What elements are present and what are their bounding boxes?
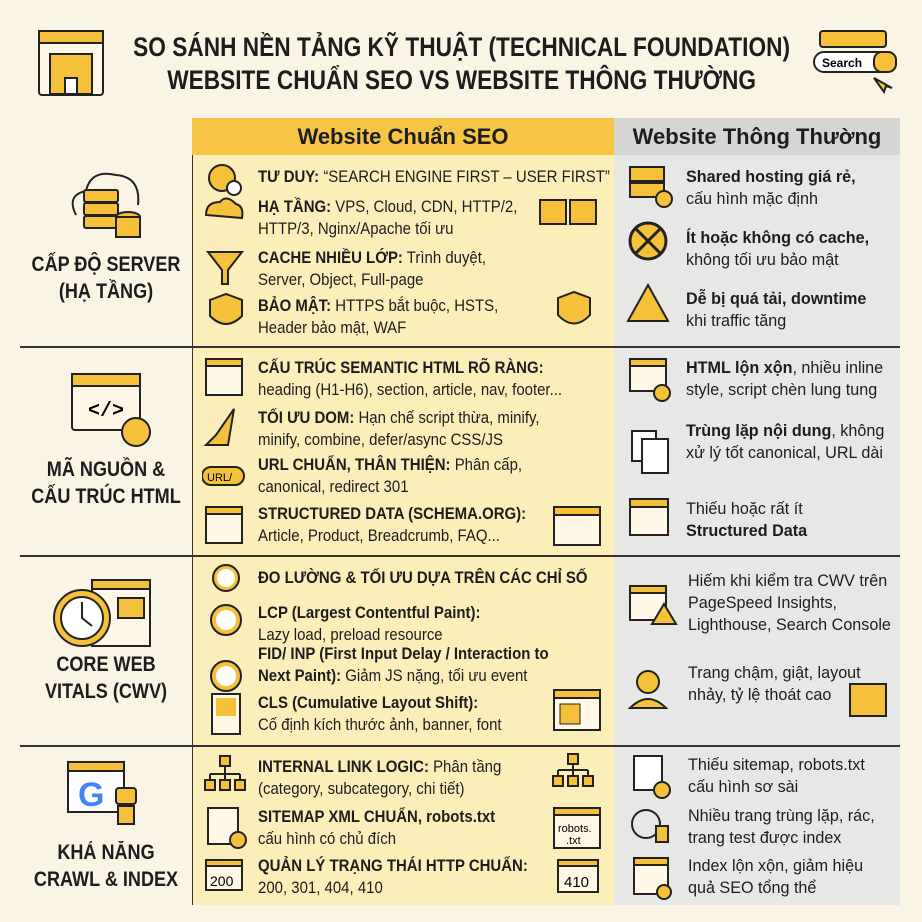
text: FID/ INP (First Input Delay / Interaction to: [258, 644, 549, 663]
text: Index lộn xộn, giảm hiệu: [688, 856, 863, 875]
label: crawl: KHẢ NĂNG: [57, 841, 155, 864]
label: cwv: VITALS (CWV): [45, 680, 167, 703]
text: Nhiều trang trùng lặp, rác,: [688, 806, 875, 825]
text: Lazy load, preload resource: [258, 625, 443, 644]
icon: google robot: [67, 761, 137, 825]
icons: html SEO: [202, 358, 601, 546]
icon: code window: </>: [88, 400, 124, 423]
heading: SEO column: [192, 118, 614, 155]
text: Thiếu sitemap, robots.txt: [688, 755, 865, 774]
icons: crawl SEO: [204, 753, 601, 893]
label: crawl: CRAWL & INDEX: [34, 868, 178, 891]
heading: SEO column: Website Chuẩn SEO: [297, 124, 509, 149]
title: SO SÁNH NỀN TẢNG KỸ THUẬT (TECHNICAL FOUNDATION): [133, 32, 790, 62]
text: Trang chậm, giật, layout: [688, 663, 861, 682]
icon: building: [38, 30, 104, 96]
text: SITEMAP XML CHUẨN, robots.txt: [258, 807, 495, 826]
text: server normal: [686, 167, 869, 330]
text: HTML lộn xộn, nhiều inline: [686, 358, 883, 377]
text: canonical, redirect 301: [258, 477, 409, 496]
icons: crawl SEO: 200: [210, 873, 234, 889]
text: URL CHUẨN, THÂN THIỆN: Phân cấp,: [258, 455, 522, 474]
text: Header bảo mật, WAF: [258, 318, 406, 337]
label: cwv: [45, 653, 167, 703]
text: LCP (Largest Contentful Paint):: [258, 603, 480, 622]
text: INTERNAL LINK LOGIC: Phân tầng: [258, 757, 501, 776]
icon: clock window: [53, 579, 151, 647]
text: khi traffic tăng: [686, 311, 786, 330]
text: Dễ bị quá tải, downtime: [686, 289, 866, 308]
text: Shared hosting giá rẻ,: [686, 167, 856, 186]
text: cấu hình có chủ đích: [258, 829, 396, 848]
text: cwv normal: [688, 571, 891, 704]
icons: crawl SEO: .txt: [566, 835, 581, 847]
panel: SEO column: [192, 118, 614, 905]
icon: search bar: [813, 30, 897, 94]
icons: html SEO: URL/: [207, 472, 233, 484]
icons: crawl SEO: robots.: [558, 823, 592, 835]
text: cấu hình mặc định: [686, 189, 818, 208]
text: HTTP/3, Nginx/Apache tối ưu: [258, 219, 453, 238]
text: crawl normal: [688, 755, 875, 897]
text: HẠ TẦNG: VPS, Cloud, CDN, HTTP/2,: [258, 197, 517, 216]
icon: search bar: Search: [822, 56, 862, 70]
text: Structured Data: [686, 521, 807, 540]
title: [133, 32, 790, 95]
label: html: CẤU TRÚC HTML: [31, 485, 181, 508]
text: STRUCTURED DATA (SCHEMA.ORG):: [258, 504, 526, 523]
text: TỐI ƯU DOM: Hạn chế script thừa, minify,: [258, 408, 540, 427]
text: PageSpeed Insights,: [688, 593, 837, 612]
label: html: MÃ NGUỒN &: [47, 458, 165, 481]
label: server: (HẠ TẦNG): [59, 280, 153, 303]
text: crawl SEO: [258, 757, 528, 897]
icons: html normal: [629, 358, 671, 536]
text: Cố định kích thước ảnh, banner, font: [258, 715, 502, 734]
text: style, script chèn lung tung: [686, 380, 877, 399]
text: CẤU TRÚC SEMANTIC HTML RÕ RÀNG:: [258, 358, 544, 377]
label: server: CẤP ĐỘ SERVER: [32, 253, 180, 276]
icons: server normal: [626, 166, 673, 322]
icon: code window: [71, 373, 151, 447]
icon: google robot: G: [78, 776, 104, 814]
text: Lighthouse, Search Console: [688, 615, 891, 634]
text: CLS (Cumulative Layout Shift):: [258, 693, 478, 712]
icon: server cloud: [72, 172, 141, 238]
text: CACHE NHIỀU LỚP: Trình duyệt,: [258, 248, 486, 267]
text: cwv SEO: [258, 568, 588, 734]
text: heading (H1-H6), section, article, nav, footer...: [258, 380, 562, 399]
text: 200, 301, 404, 410: [258, 878, 383, 897]
panel: normal column: [614, 118, 900, 905]
text: Trùng lặp nội dung, không: [686, 421, 884, 440]
text: Next Paint): Giảm JS nặng, tối ưu event: [258, 666, 527, 685]
text: Article, Product, Breadcrumb, FAQ...: [258, 526, 500, 545]
text: nhảy, tỷ lệ thoát cao: [688, 685, 831, 704]
text: xử lý tốt canonical, URL dài: [686, 443, 883, 462]
label: html: [31, 457, 181, 508]
heading: normal column: Website Thông Thường: [633, 124, 881, 149]
label: cwv: CORE WEB: [56, 653, 156, 676]
text: ĐO LƯỜNG & TỐI ƯU DỰA TRÊN CÁC CHỈ SỐ: [258, 568, 588, 587]
text: TƯ DUY: “SEARCH ENGINE FIRST – USER FIRST”: [258, 167, 610, 186]
text: html SEO: [258, 358, 562, 545]
icons: crawl SEO: 410: [564, 874, 589, 891]
icons: crawl normal: [631, 755, 672, 900]
text: Thiếu hoặc rất ít: [686, 499, 803, 518]
text: Server, Object, Full-page: [258, 270, 423, 289]
text: html normal: [686, 358, 884, 540]
heading: normal column: [614, 118, 900, 155]
label: server: [32, 252, 180, 303]
icons: cwv normal: [628, 585, 887, 717]
icons: server SEO: [205, 164, 597, 325]
text: Ít hoặc không có cache,: [686, 228, 869, 247]
text: không tối ưu bảo mật: [686, 250, 839, 269]
text: Hiếm khi kiểm tra CWV trên: [688, 571, 887, 590]
text: minify, combine, defer/async CSS/JS: [258, 430, 503, 449]
title: WEBSITE CHUẨN SEO VS WEBSITE THÔNG THƯỜNG: [167, 65, 756, 95]
text: quả SEO tổng thể: [688, 878, 816, 897]
text: (category, subcategory, chi tiết): [258, 779, 464, 798]
text: QUẢN LÝ TRẠNG THÁI HTTP CHUẨN:: [258, 856, 528, 875]
text: trang test được index: [688, 828, 841, 847]
icons: cwv SEO: [210, 564, 601, 735]
text: cấu hình sơ sài: [688, 777, 798, 796]
text: BẢO MẬT: HTTPS bắt buộc, HSTS,: [258, 296, 498, 315]
label: crawl: [34, 841, 178, 891]
text: server SEO: [258, 167, 610, 337]
